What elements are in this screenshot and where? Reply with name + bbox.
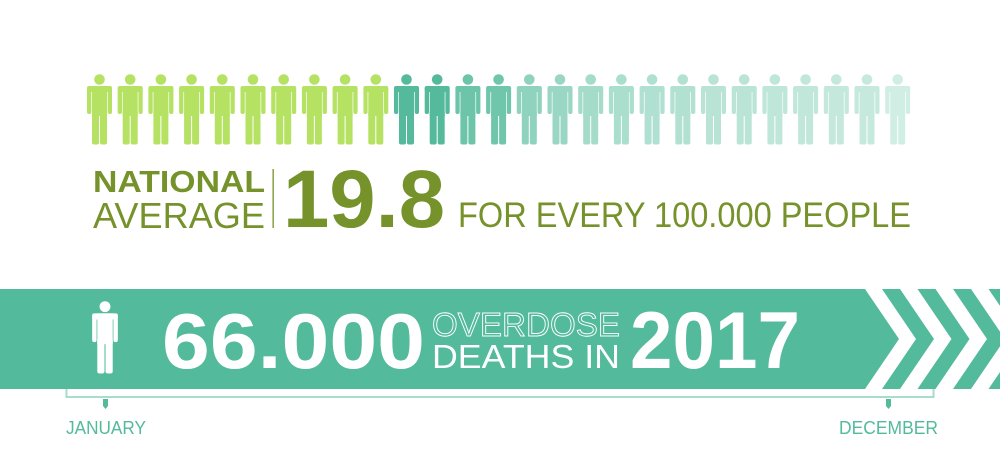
label december: DECEMBER <box>839 418 938 438</box>
rate caption: FOR EVERY 100.000 PEOPLE <box>458 196 911 235</box>
people row pictogram <box>87 74 910 144</box>
rate number: 19.8 <box>283 154 445 245</box>
overdose deaths label <box>432 306 620 375</box>
icon: person <box>92 301 118 373</box>
overdose deaths label: DEATHS IN <box>432 338 620 375</box>
national average heading: NATIONAL <box>93 164 265 199</box>
national average heading <box>93 164 265 236</box>
label january: JANUARY <box>66 418 146 438</box>
banner <box>0 289 1000 389</box>
year: 2017 <box>630 296 800 386</box>
national average heading: AVERAGE <box>93 195 265 236</box>
big number: 66.000 <box>162 297 425 385</box>
overdose deaths label: OVERDOSE <box>432 306 620 343</box>
chevrons <box>882 289 1000 389</box>
timeline bracket <box>66 389 934 409</box>
